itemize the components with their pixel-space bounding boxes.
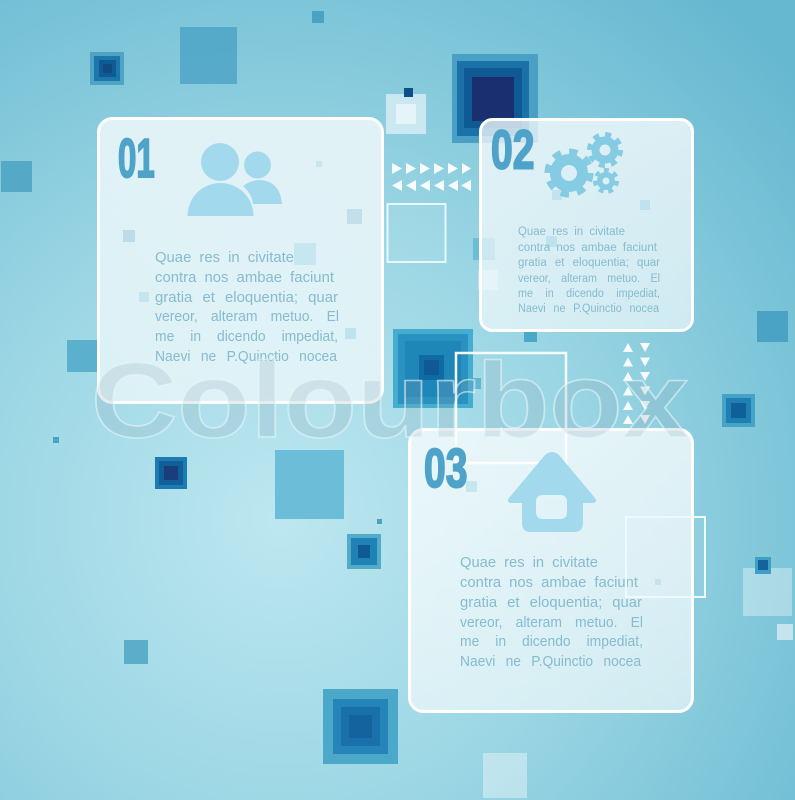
panel: 03 house	[410, 430, 692, 712]
watermark: Colourbox	[91, 340, 689, 460]
panel 02 speckles	[546, 190, 650, 247]
nested square top centre	[452, 54, 538, 143]
text block 02: me in dicendo impediat,	[518, 288, 660, 300]
nested square lower centre	[347, 534, 381, 569]
outline square centre	[456, 353, 566, 463]
text block 03	[460, 554, 643, 670]
icon: gears	[548, 134, 620, 194]
text block 01: Naevi ne P.Quinctio nocea	[155, 348, 338, 365]
text block 03: gratia et eloquentia; quar	[460, 594, 642, 611]
text block 03: contra nos ambae faciunt	[460, 574, 639, 591]
text block 02: Quae res in civitate	[518, 226, 625, 238]
arrows between panels 2 and 3	[623, 343, 650, 424]
panel: 02 gears	[480, 120, 692, 330]
outline square right	[626, 517, 705, 597]
panel: 01 people	[98, 118, 382, 402]
number 02: 02	[491, 120, 534, 181]
nested square centre	[393, 329, 473, 408]
text block 01: gratia et eloquentia; quar	[155, 289, 338, 306]
text block 02	[518, 226, 660, 315]
text block 02: gratia et eloquentia; quar	[518, 257, 660, 269]
icon: people	[188, 143, 282, 216]
small speckles	[466, 481, 661, 585]
text block 01: me in dicendo impediat,	[155, 328, 338, 345]
panel 02 card	[480, 120, 692, 330]
arrows between panels 1 and 2	[392, 163, 471, 191]
nested square top left	[90, 52, 124, 85]
nested square right	[722, 394, 755, 427]
text block 03: me in dicendo impediat,	[460, 633, 643, 650]
nested square lower left	[155, 457, 187, 489]
text block 03: Quae res in civitate	[460, 554, 598, 571]
text block 03: Naevi ne P.Quinctio nocea	[460, 653, 642, 670]
nested square bottom	[323, 689, 398, 764]
panel 01 card	[98, 118, 382, 402]
text block 01: vereor, alteram metuo. El	[155, 308, 339, 325]
number 01: 01	[118, 127, 155, 189]
text block 02: vereor, alteram metuo. El	[518, 273, 660, 285]
text block 02: Naevi ne P.Quinctio nocea	[518, 303, 660, 315]
nested square small right	[755, 557, 771, 574]
text block 01	[155, 249, 339, 365]
panel 01 speckles	[123, 161, 362, 339]
text block 01: Quae res in civitate	[155, 249, 294, 266]
outline square upper	[388, 204, 446, 262]
text block 03: vereor, alteram metuo. El	[460, 614, 643, 631]
text block 01: contra nos ambae faciunt	[155, 269, 335, 286]
text block 02: contra nos ambae faciunt	[518, 242, 658, 254]
translucent square with dark tab	[386, 88, 426, 134]
icon: house	[508, 452, 596, 532]
number 03: 03	[424, 439, 467, 500]
panel 03 card	[410, 430, 692, 712]
